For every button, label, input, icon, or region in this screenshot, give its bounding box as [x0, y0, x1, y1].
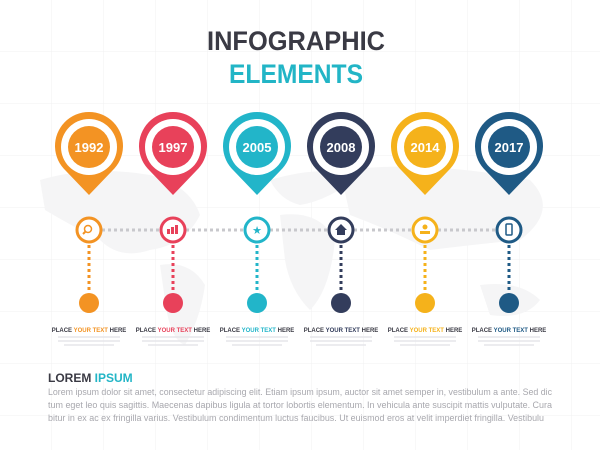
timeline item 2014: 2014	[411, 140, 440, 155]
title: ELEMENTS	[229, 59, 363, 89]
world map silhouette	[40, 167, 543, 345]
horizontal dotted connector	[102, 228, 496, 232]
timeline item 2017: 2017	[495, 140, 523, 155]
timeline item 2008: PLACE YOUR TEXT HERE	[304, 328, 378, 334]
timeline item 1997: 1997	[159, 140, 187, 155]
timeline item 1992	[52, 112, 126, 345]
title	[207, 26, 385, 89]
timeline item 1992: PLACE YOUR TEXT HERE	[52, 328, 126, 334]
body text: tum eget leo quis sagittis. Maecenas dapibus ligula at tortor lobortis elementum. In vehicula ante suscipit mattis vulputate. Cura	[48, 400, 552, 410]
body text: bitur in ex ac ex fringilla varius. Vestibulum condimentum luctus faucibus. Ut euismod eros at velit imperdiet fringilla. Vestibulu	[48, 413, 544, 423]
lorem ipsum heading: LOREM IPSUM	[48, 371, 133, 385]
timeline item 2014: PLACE YOUR TEXT HERE	[388, 328, 462, 334]
title: INFOGRAPHIC	[207, 26, 385, 56]
timeline item 2008: 2008	[327, 140, 355, 155]
body text: Lorem ipsum dolor sit amet, consectetur adipiscing elit. Etiam ipsum ipsum, auctor sit amet semper in, vestibulum a ante. Sed dic	[48, 387, 552, 397]
timeline item 1997: PLACE YOUR TEXT HERE	[136, 328, 210, 334]
body text	[48, 387, 552, 423]
timeline item 2005: ★	[252, 225, 262, 237]
timeline item 2005	[220, 112, 294, 345]
timeline item 2017	[472, 112, 546, 345]
timeline item 1997	[136, 112, 210, 345]
timeline item 2014	[388, 112, 462, 345]
timeline item 1992: 1992	[75, 140, 103, 155]
timeline item 2005: 2005	[243, 140, 271, 155]
timeline item 2017: PLACE YOUR TEXT HERE	[472, 328, 546, 334]
timeline item 2005: PLACE YOUR TEXT HERE	[220, 328, 294, 334]
timeline item 2008	[304, 112, 378, 345]
